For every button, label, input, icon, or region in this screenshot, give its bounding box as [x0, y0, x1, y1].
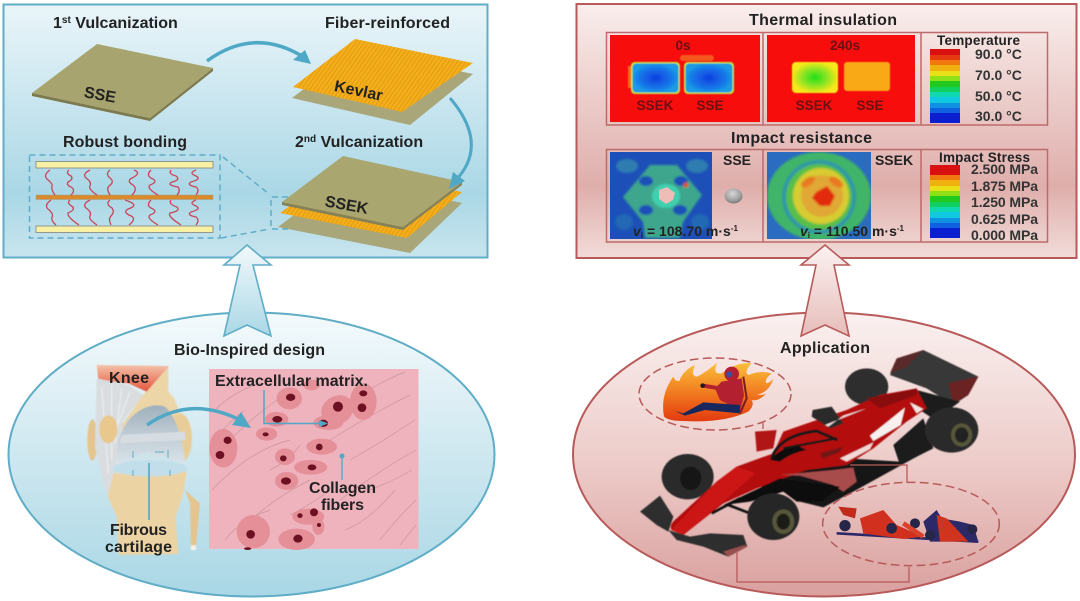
label: collagen fibers: fibers [321, 497, 364, 514]
panel: performance tests [576, 4, 1076, 258]
callout: crash impact [823, 482, 999, 566]
projectile sphere [724, 188, 742, 204]
panel: fabrication process [4, 4, 488, 258]
callout: fire protection [639, 358, 791, 430]
heading: 1st vulcanization: st [62, 15, 71, 26]
label: extracellular matrix: Extracellular matrix. [215, 373, 368, 390]
heading: thermal insulation: Thermal insulation [749, 12, 897, 29]
velocity: SSEK: i [808, 231, 810, 240]
racing car [640, 350, 978, 557]
fibrous cartilage leader [133, 450, 170, 520]
stress map: SSEK [767, 152, 871, 240]
labels: 0s: SSE [696, 98, 724, 113]
impact stress legend: 1.875 MPa [971, 178, 1038, 194]
thermal map: 0s [610, 35, 760, 122]
labels: 240s [796, 38, 884, 113]
velocity: SSEK: -1 [897, 224, 905, 233]
velocity: SSE: i [641, 231, 643, 240]
velocity: SSEK: v [800, 223, 809, 239]
velocity: SSEK: = 110.50 m·s [810, 223, 897, 239]
label: knee: Knee [109, 370, 149, 387]
SSE sheet [32, 44, 213, 121]
velocity: SSE: = 108.70 m·s [643, 223, 731, 239]
labels: 240s: SSEK [796, 98, 833, 113]
temperature legend: 70.0 °C [975, 67, 1022, 83]
label: SSE: SSE [723, 152, 751, 168]
zoom lines [221, 157, 288, 238]
label: SSE: SSE [83, 84, 117, 107]
labels: 0s: SSEK [637, 98, 674, 113]
temperature legend [930, 33, 1022, 124]
arrow: Kevlar to SSEK [449, 98, 471, 189]
arrow: bio-inspiration up [224, 245, 271, 336]
labels: 240s: SSE [856, 98, 884, 113]
heading: fiber-reinforced: Fiber-reinforced [325, 15, 450, 32]
impact stress legend: 0.625 MPa [971, 211, 1038, 227]
SSEK laminate [278, 156, 462, 253]
velocity: SSE: v [633, 223, 642, 239]
arrow: knee to tissue [147, 409, 251, 428]
oval: bio-inspired design [8, 312, 494, 596]
heading: robust bonding: Robust bonding [63, 134, 187, 151]
labels: 0s [637, 38, 724, 113]
heading: 2nd vulcanization: 2 [295, 134, 304, 151]
label: Kevlar: Kevlar [333, 78, 384, 105]
Kevlar sheet [292, 39, 473, 125]
temperature legend: Temperature [937, 33, 1020, 48]
impact stress legend: 1.250 MPa [971, 194, 1038, 210]
velocity: SSE: -1 [731, 224, 739, 233]
temperature legend: 90.0 °C [975, 46, 1022, 62]
label: collagen fibers [309, 480, 376, 514]
heading: 2nd vulcanization: Vulcanization [316, 134, 423, 151]
impact stress legend: 0.000 MPa [971, 227, 1038, 243]
heading: 1st vulcanization: Vulcanization [71, 15, 178, 32]
impact stress legend: 2.500 MPa [971, 161, 1038, 177]
label: collagen fibers: Collagen [309, 480, 376, 497]
oval: application [573, 312, 1075, 596]
label: SSEK: SSEK [875, 152, 913, 168]
stress map: SSE [610, 152, 712, 239]
leader: collagen fibers [340, 454, 344, 480]
label: fibrous cartilage: Fibrous [110, 522, 167, 539]
label: fibrous cartilage: cartilage [105, 539, 172, 556]
arrow: application up [801, 245, 849, 336]
thermal map: 240s [767, 35, 915, 122]
heading: impact resistance: Impact resistance [731, 130, 872, 147]
knee anatomy illustration [87, 365, 200, 555]
heading: 1st vulcanization: 1 [53, 15, 62, 32]
leader: extracellular matrix [264, 390, 328, 427]
labels: 240s: 240s [830, 38, 860, 53]
temperature legend: 30.0 °C [975, 108, 1022, 124]
heading: 2nd vulcanization: nd [304, 134, 316, 145]
label: fibrous cartilage [105, 522, 172, 556]
heading: application: Application [780, 340, 870, 357]
impact frame [606, 150, 1048, 242]
connector lines [737, 423, 909, 582]
tissue micrograph [209, 369, 418, 550]
temperature legend: 50.0 °C [975, 88, 1022, 104]
heading: bio-inspired design: Bio-Inspired design [174, 342, 325, 359]
impact stress legend: Impact Stress [939, 150, 1030, 165]
impact stress legend [930, 150, 1038, 243]
labels: 0s: 0s [675, 38, 691, 53]
bonding diagram [30, 155, 220, 238]
arrow: SSE to Kevlar [207, 43, 311, 64]
label: SSEK: SSEK [324, 193, 370, 218]
thermal frame [606, 32, 1048, 125]
